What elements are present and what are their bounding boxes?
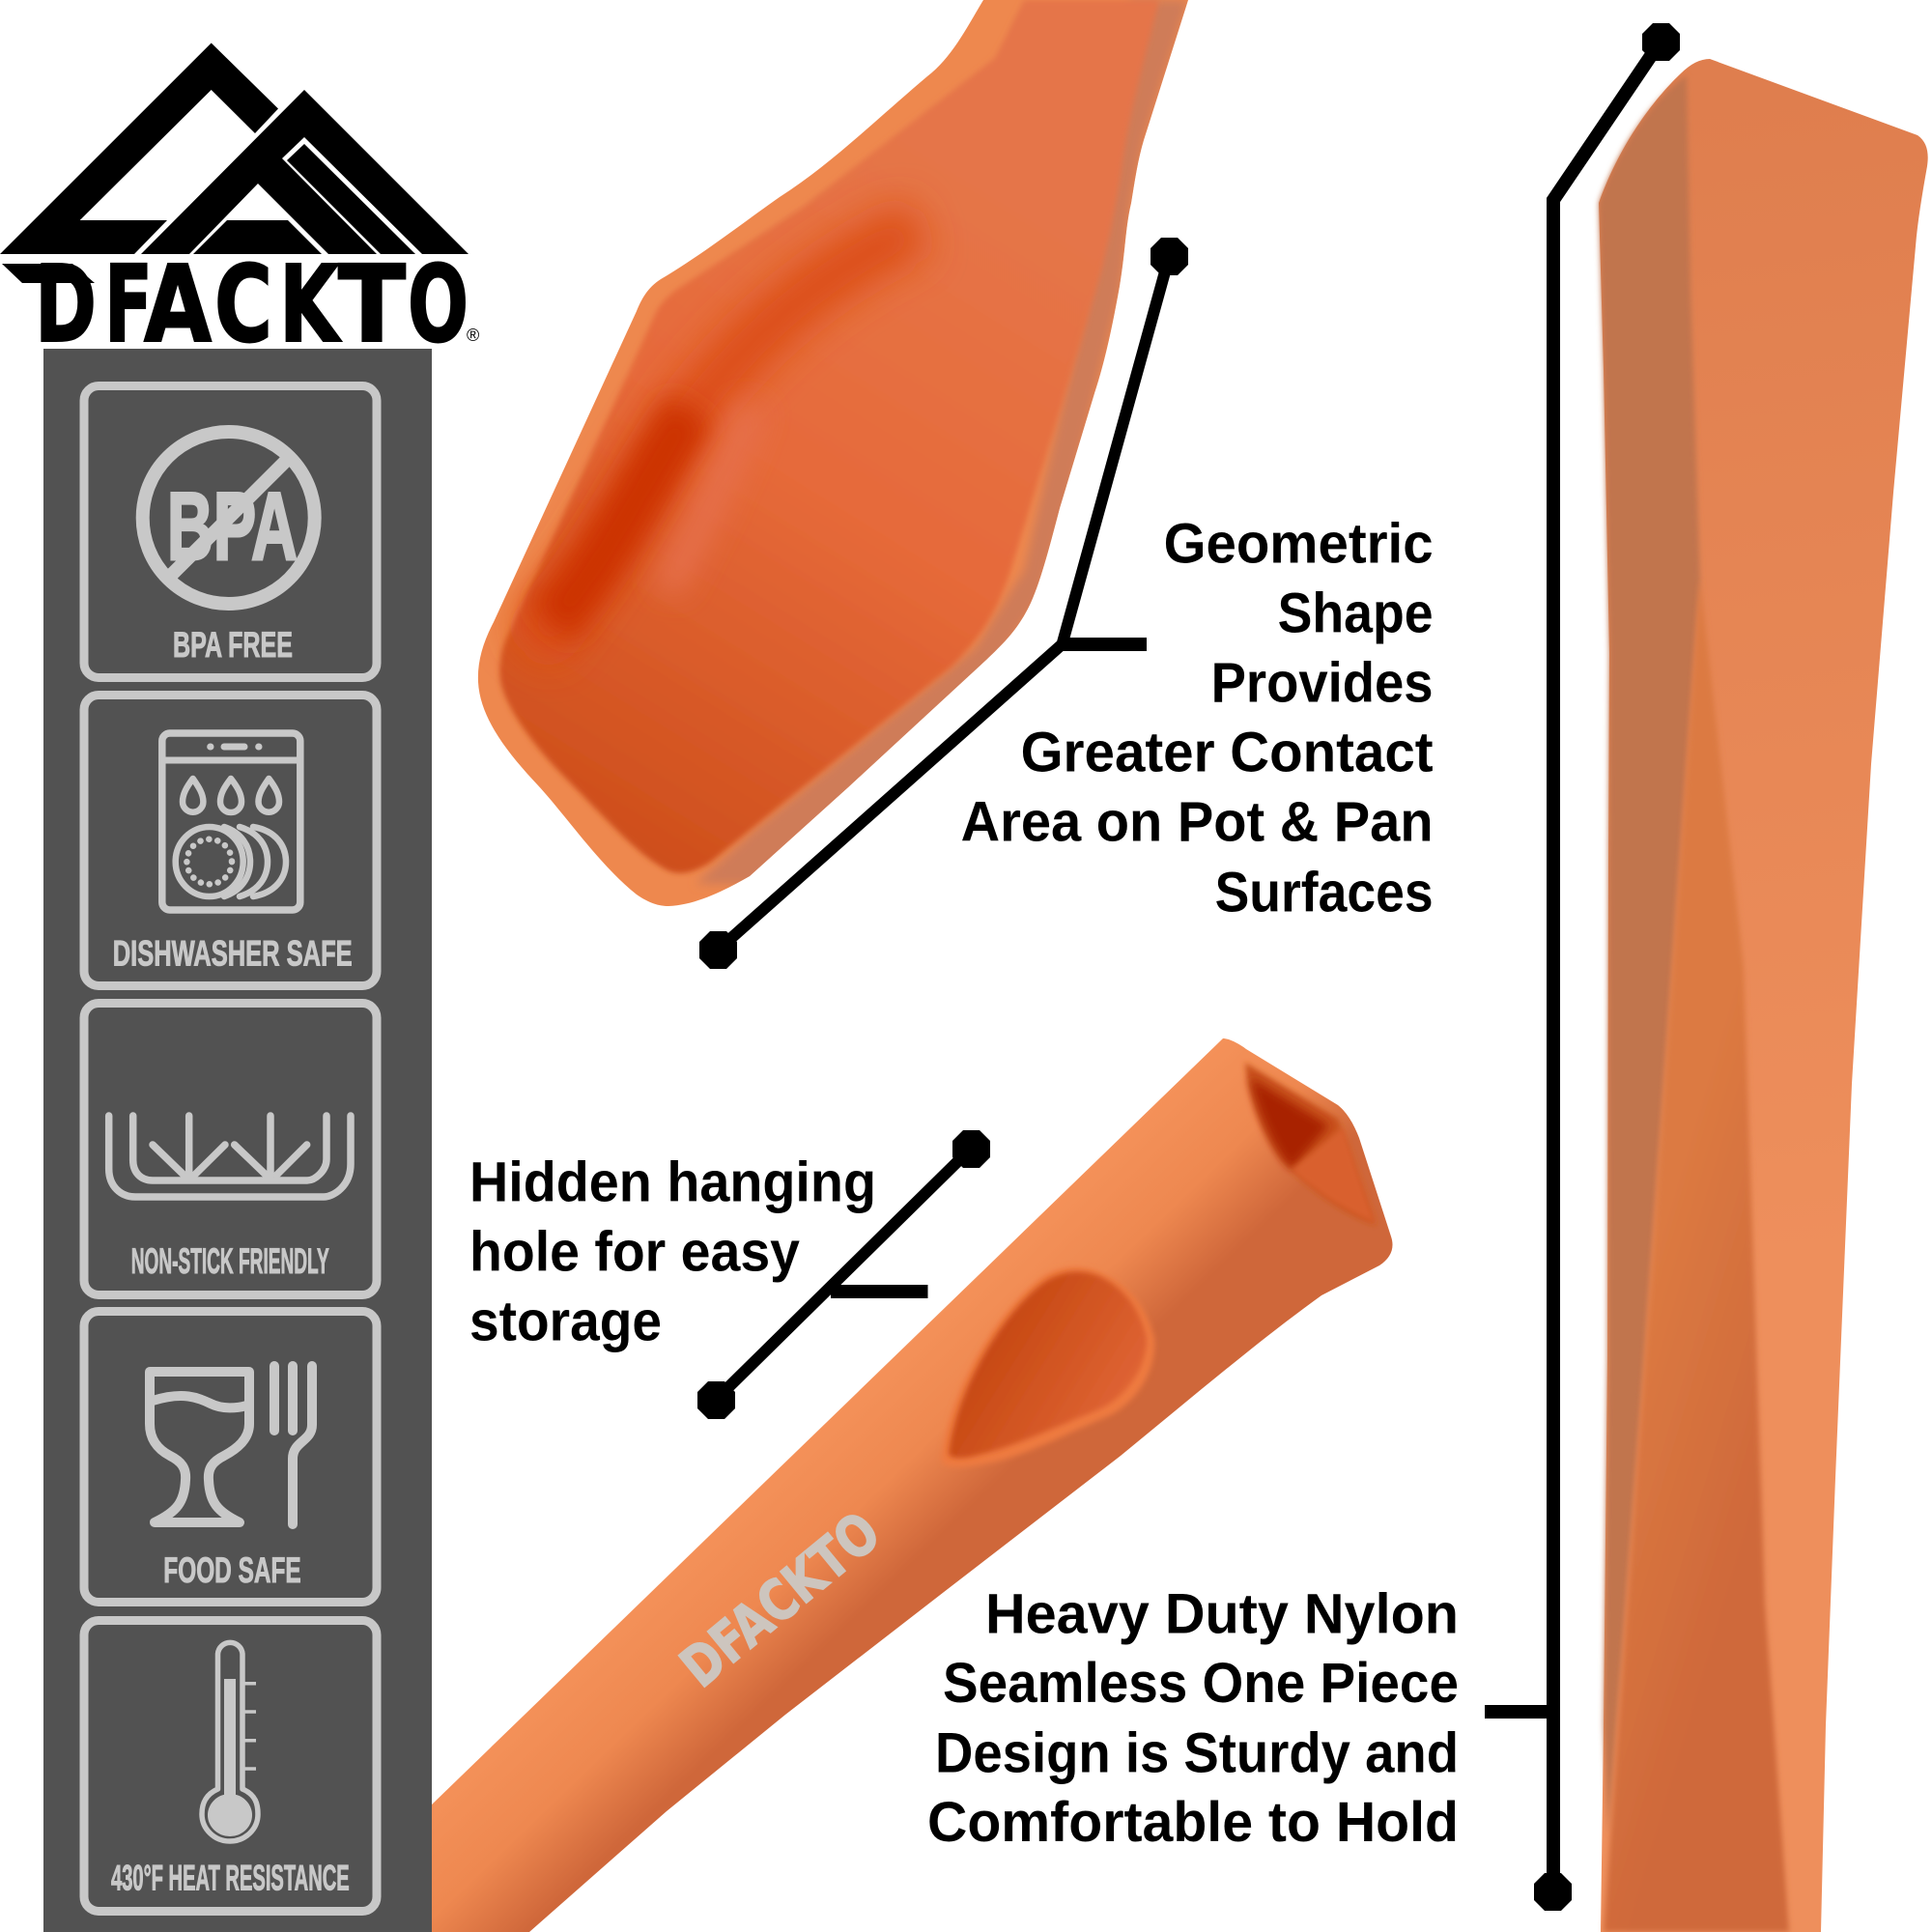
right handle photo	[1599, 59, 1928, 1932]
label: FOOD SAFE	[163, 1550, 301, 1590]
text block: Surfaces	[1215, 862, 1434, 923]
text block	[469, 1151, 876, 1352]
registered mark: ®	[467, 326, 479, 345]
callout: geometric shape	[699, 238, 1434, 969]
text block	[961, 512, 1434, 923]
panel: feature icons	[43, 349, 432, 1932]
card: food safe	[84, 1312, 377, 1602]
text block: Heavy Duty Nylon	[985, 1582, 1459, 1646]
icon: thermometer	[202, 1642, 258, 1841]
icon: pan	[109, 1116, 351, 1197]
pointer lines	[697, 1130, 990, 1419]
text block: Provides	[1211, 651, 1434, 715]
card: BPA free	[84, 386, 377, 678]
logo wordmark: D	[35, 242, 97, 366]
hanging hole teardrop	[941, 1267, 1154, 1467]
logo wordmark: F	[104, 242, 153, 366]
spatula head photo	[478, 0, 1188, 906]
logo wordmark: O	[408, 242, 469, 366]
label: DISHWASHER SAFE	[113, 933, 353, 973]
text block: Greater Contact	[1021, 721, 1434, 784]
DFACKTO mark on handle: DFACKTO	[668, 1499, 893, 1700]
text block: Geometric	[1164, 512, 1434, 576]
lower handle photo	[432, 1038, 1393, 1932]
text block: Area on Pot & Pan	[961, 790, 1434, 854]
card: dishwasher safe	[84, 696, 377, 985]
icon: BPA crossed: BPA	[167, 472, 298, 580]
logo wordmark: K	[279, 242, 342, 366]
text block: storage	[469, 1291, 662, 1352]
left shaded facet	[1599, 75, 1700, 1835]
logo wedge	[2, 264, 95, 283]
text block: Design is Sturdy and	[935, 1721, 1459, 1785]
pointer lines	[1485, 23, 1680, 1911]
icon: BPA crossed	[143, 432, 315, 604]
text block: Shape	[1278, 582, 1434, 645]
card: non-stick friendly	[84, 1003, 377, 1294]
logo: DFACKTO	[0, 43, 479, 366]
logo peaks	[0, 43, 469, 254]
text block: hole for easy	[469, 1221, 800, 1283]
icon: glass and fork	[150, 1366, 312, 1524]
card: heat resistance	[84, 1621, 377, 1911]
text block: Comfortable to Hold	[927, 1791, 1459, 1854]
handle top opening	[1245, 1063, 1376, 1225]
logo wordmark: T	[338, 242, 406, 366]
logo wordmark	[35, 242, 469, 366]
icon: dishwasher	[162, 733, 300, 910]
text block: Seamless One Piece	[943, 1652, 1459, 1715]
text block	[927, 1582, 1459, 1854]
logo wordmark: C	[214, 242, 272, 366]
label: 430°F HEAT RESISTANCE	[111, 1859, 350, 1898]
callout: heavy duty nylon	[927, 23, 1680, 1911]
text block: Hidden hanging	[469, 1151, 876, 1213]
middle dark facet	[1604, 580, 1789, 1932]
logo wordmark: A	[144, 242, 212, 366]
callout: hanging hole	[469, 1130, 990, 1419]
pointer lines	[699, 238, 1188, 969]
label: BPA FREE	[173, 625, 293, 665]
label: NON-STICK FRIENDLY	[131, 1241, 329, 1281]
